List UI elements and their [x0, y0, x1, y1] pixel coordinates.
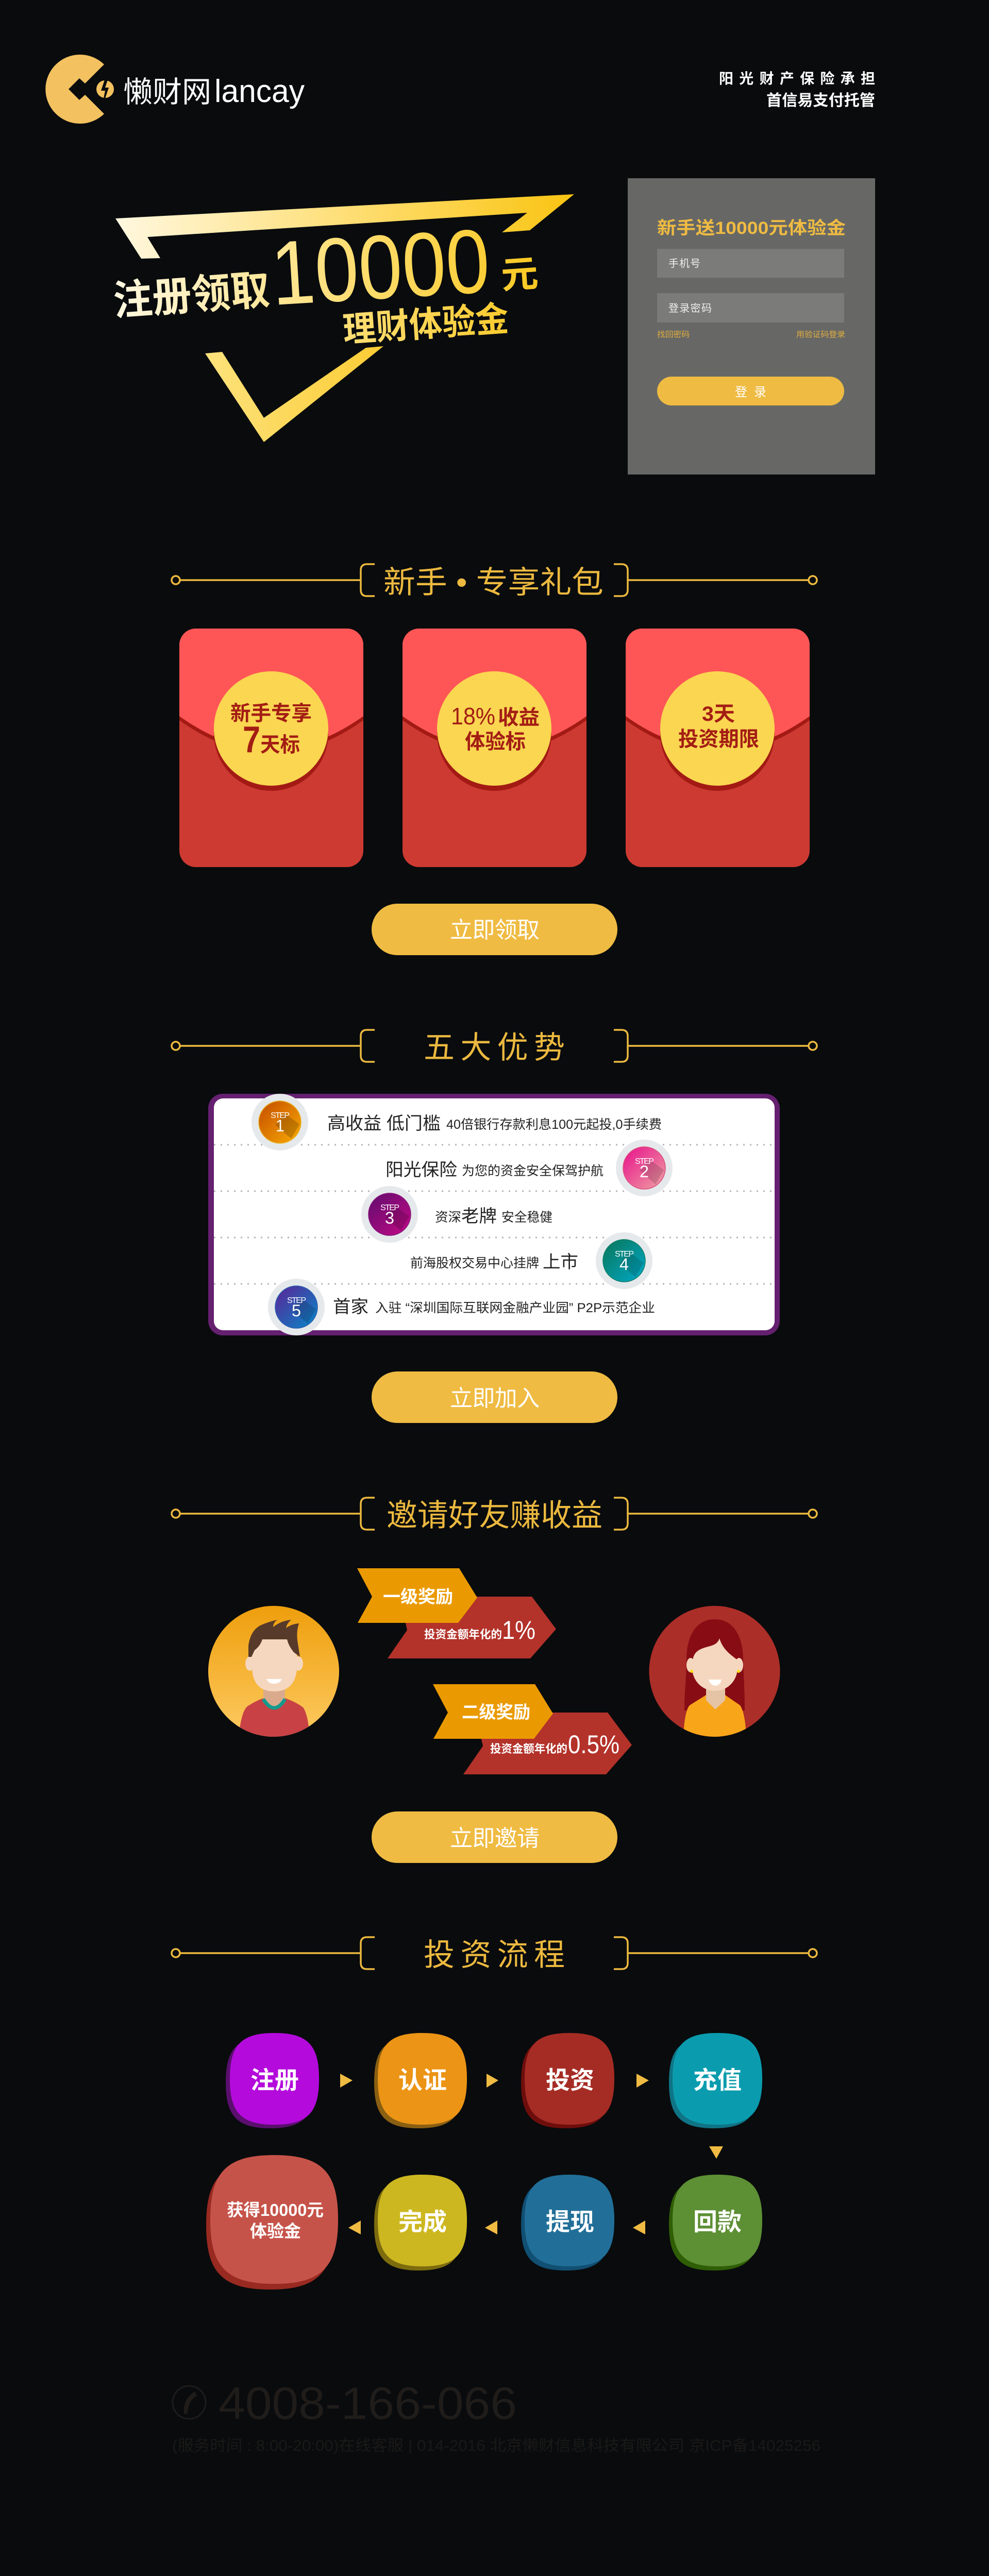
step 4 badge: 4: [619, 1255, 629, 1274]
hero banner: [112, 194, 574, 442]
process step: complete: 完成: [398, 2208, 447, 2235]
arrow: [348, 2221, 361, 2234]
button: claim: [372, 904, 617, 955]
step 5 badge: STEP: [287, 1296, 306, 1305]
orange ribbon: [357, 1568, 477, 1623]
button: invite: 立即邀请: [450, 1826, 540, 1851]
step 1 text: [327, 1114, 662, 1133]
button: invite: [372, 1811, 617, 1863]
hotline number: 4008-166-066: [219, 2378, 517, 2429]
logo latin name: lancay: [214, 74, 305, 109]
triangle frame top: [115, 194, 574, 259]
password input: [657, 293, 844, 323]
step 2 badge: STEP: [635, 1157, 654, 1166]
step 5 badge: 5: [292, 1301, 301, 1320]
section heading: invite friends: [172, 1498, 817, 1533]
process step: invest: 投资: [546, 2066, 594, 2094]
process step: withdraw: [521, 2175, 614, 2270]
reward description: 投资金额年化的: [424, 1628, 502, 1641]
arrow: [487, 2074, 498, 2088]
section heading: five advantages: 五大优势: [424, 1030, 565, 1065]
packet label: 投资期限: [678, 728, 759, 751]
process step: complete: [374, 2175, 467, 2270]
step 2 text: 为您的资金安全保驾护航: [462, 1164, 604, 1178]
red ribbon: [463, 1713, 632, 1774]
hero subtitle: 理财体验金: [342, 299, 510, 350]
section heading: invite friends: 邀请好友赚收益: [387, 1498, 602, 1533]
phone input: [657, 249, 844, 278]
step 4 text: 上市: [543, 1252, 578, 1272]
step 2 text: 阳光保险: [385, 1160, 457, 1180]
arrow: [485, 2221, 497, 2234]
hero currency: 元: [500, 253, 540, 297]
step 5 text: 首家: [333, 1297, 368, 1317]
icon: lightning coin: [96, 80, 114, 98]
button: claim: 立即领取: [450, 918, 540, 943]
hero amount: 10000: [268, 210, 493, 325]
logo wordmark: 懒财网: [123, 76, 211, 109]
step 3 badge: STEP: [380, 1204, 399, 1212]
process step: invest: [521, 2033, 614, 2128]
orange ribbon: [433, 1684, 553, 1739]
process step: reward: 体验金: [250, 2222, 301, 2241]
section heading: five advantages: [172, 1030, 817, 1065]
step 3 text: 资深: [435, 1210, 461, 1225]
step 3 text: 安全稳健: [501, 1210, 552, 1225]
step 3 badge: [361, 1186, 418, 1243]
reward title: 二级奖励: [462, 1703, 530, 1722]
step 1 badge: STEP: [271, 1111, 290, 1120]
step 2 badge: 2: [640, 1162, 649, 1181]
link: recover password: 找回密码: [657, 330, 690, 339]
step 1 badge: 1: [276, 1116, 284, 1135]
process step: reward: 获得10000元: [227, 2200, 324, 2219]
reward description: 投资金额年化的: [490, 1742, 567, 1755]
arrow: [636, 2074, 649, 2088]
process step: verify: 认证: [398, 2066, 447, 2094]
button: join: [372, 1371, 617, 1423]
link: code login: 用验证码登录: [796, 330, 845, 339]
panel: five advantages: [208, 1094, 780, 1335]
step 4 text: 前海股权交易中心挂牌: [410, 1256, 539, 1270]
step 3 badge: 3: [385, 1209, 394, 1227]
process step: top up: [669, 2033, 762, 2128]
step 4 text: [410, 1252, 578, 1272]
step 1 text: 40倍银行存款利息100元起投,0手续费: [446, 1117, 662, 1132]
step 3 text: 老牌: [461, 1207, 497, 1226]
icon: pac-man logo mark: [45, 55, 104, 124]
step 4 badge: [596, 1232, 652, 1289]
section heading: investment process: [172, 1937, 817, 1972]
slogan line one: 阳光财产保险承担: [719, 71, 875, 87]
reward rate: 1%: [502, 1616, 535, 1645]
red packet three: [626, 629, 810, 867]
step 5 text: [333, 1297, 655, 1317]
arrow: [633, 2221, 645, 2234]
process step: register: 注册: [250, 2066, 299, 2094]
section heading: investment process: 投资流程: [424, 1938, 565, 1972]
step 5 text: 入驻 “深圳国际互联网金融产业园” P2P示范企业: [375, 1301, 655, 1315]
logo: [45, 55, 305, 124]
password input: 登录密码: [668, 302, 712, 314]
step 2 badge: [616, 1140, 673, 1196]
packet label: 体验标: [465, 731, 526, 753]
reward one: [357, 1568, 556, 1658]
panel: login form: [628, 178, 875, 474]
footer: [172, 2378, 820, 2454]
process step: verify: [374, 2033, 467, 2128]
triangle frame bottom: [205, 346, 383, 442]
login button: 登录: [735, 385, 766, 399]
footer info: (服务时间 : 8:00-20:00)在线客服 | 014-2016 北京懒财信息科技有限公司 京ICP备14025256: [172, 2437, 820, 2454]
reward two: [433, 1684, 632, 1774]
icon: phone: [173, 2386, 206, 2419]
process step: register: [226, 2033, 319, 2128]
step 1 badge: [252, 1094, 308, 1150]
button: join: 立即加入: [450, 1386, 540, 1411]
red packet two: [403, 629, 586, 867]
phone input: 手机号: [668, 258, 700, 269]
reward title: 一级奖励: [383, 1587, 453, 1607]
slogan line two: 首信易支付托管: [766, 92, 875, 109]
arrow: [709, 2146, 723, 2159]
avatar: man: [208, 1606, 339, 1737]
packet number: 7: [243, 719, 260, 760]
process step: reward: [206, 2155, 338, 2290]
packet label: 天标: [260, 734, 300, 756]
packet days: 3天: [702, 703, 735, 725]
arrow: [340, 2074, 353, 2088]
red packet one: [179, 629, 363, 867]
section heading: new user gift: 新手 • 专享礼包: [383, 565, 604, 600]
reward rate: 0.5%: [568, 1730, 619, 1759]
login button: [657, 377, 844, 405]
header slogan: [719, 71, 875, 109]
step 4 badge: STEP: [615, 1250, 634, 1259]
process step: withdraw: 提现: [546, 2208, 594, 2235]
process step: repayment: 回款: [693, 2208, 742, 2235]
hero text register: 注册领取: [112, 267, 271, 324]
process step: top up: 充值: [693, 2066, 742, 2094]
avatar: woman: [649, 1606, 780, 1737]
section heading: new user gift: [172, 564, 817, 600]
step 1 text: 高收益 低门槛: [327, 1114, 441, 1133]
form title: 新手送10000元体验金: [657, 218, 846, 238]
step 2 text: [385, 1160, 604, 1180]
packet yield: 收益: [498, 706, 540, 729]
step 3 text: [435, 1207, 552, 1226]
packet rate: 18%: [451, 703, 495, 730]
process step: repayment: [669, 2175, 762, 2270]
packet text: 新手专享: [230, 702, 312, 725]
step 5 badge: [268, 1279, 325, 1335]
red ribbon: [388, 1597, 556, 1658]
